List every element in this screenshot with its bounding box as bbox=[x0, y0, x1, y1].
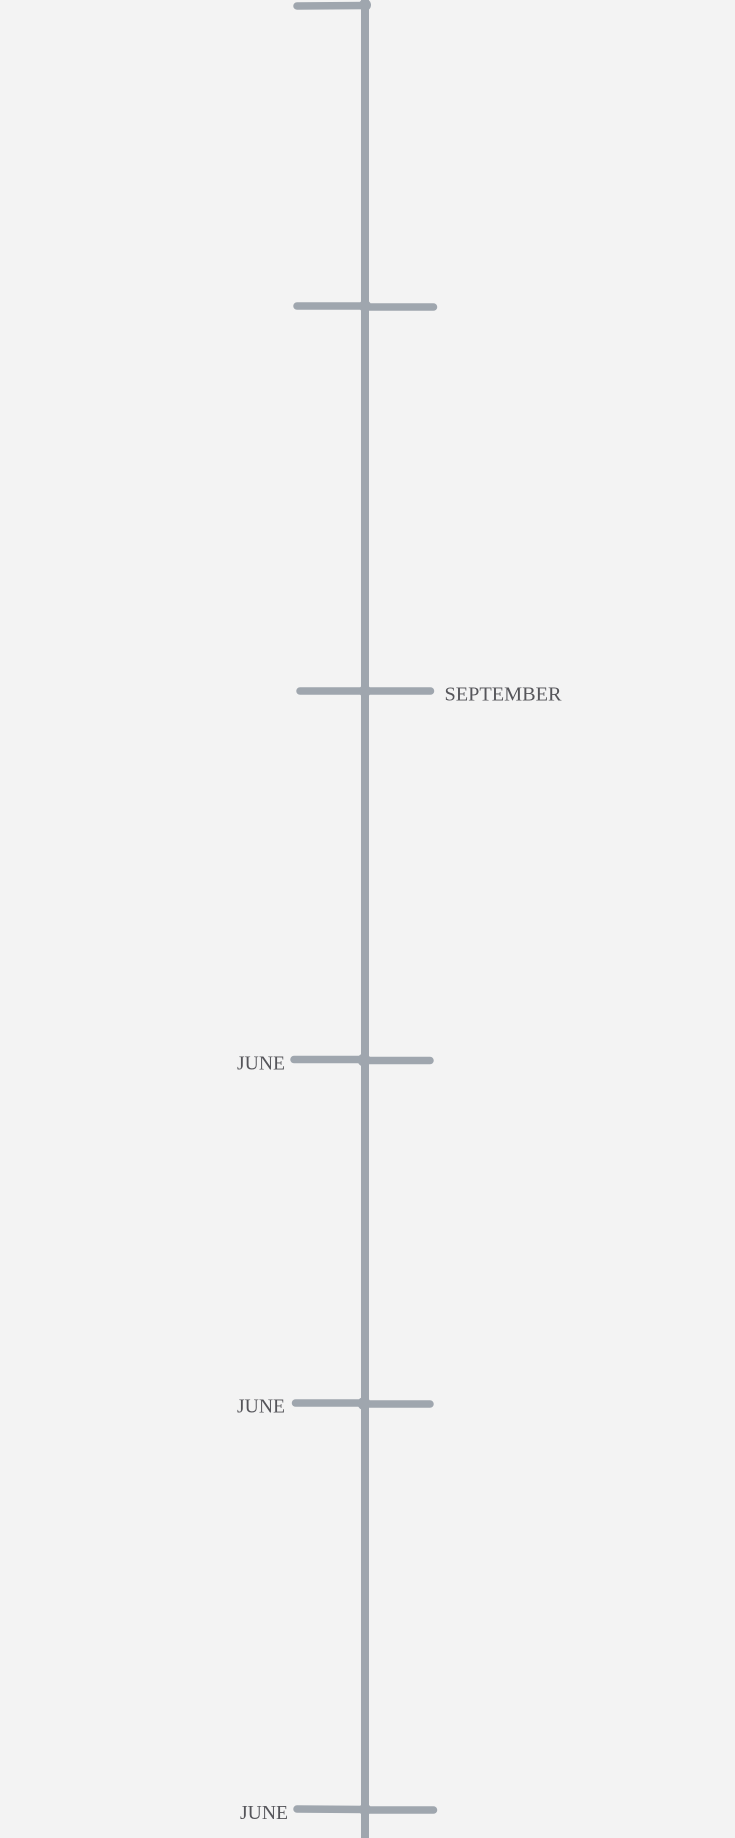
milestone 4 tick bbox=[294, 1054, 430, 1066]
timeline spine bbox=[361, 0, 369, 1838]
month label: June: JUNE bbox=[240, 1802, 288, 1824]
month label: September: SEPTEMBER bbox=[444, 684, 562, 706]
milestone 6 tick bbox=[297, 1804, 434, 1816]
month label: June: JUNE bbox=[237, 1396, 285, 1418]
milestone 3 tick bbox=[300, 685, 430, 697]
month label: June: JUNE bbox=[237, 1052, 285, 1074]
milestone 2 tick bbox=[297, 300, 434, 312]
milestone 5 tick bbox=[296, 1397, 430, 1410]
milestone 1 tick bbox=[297, 0, 371, 11]
